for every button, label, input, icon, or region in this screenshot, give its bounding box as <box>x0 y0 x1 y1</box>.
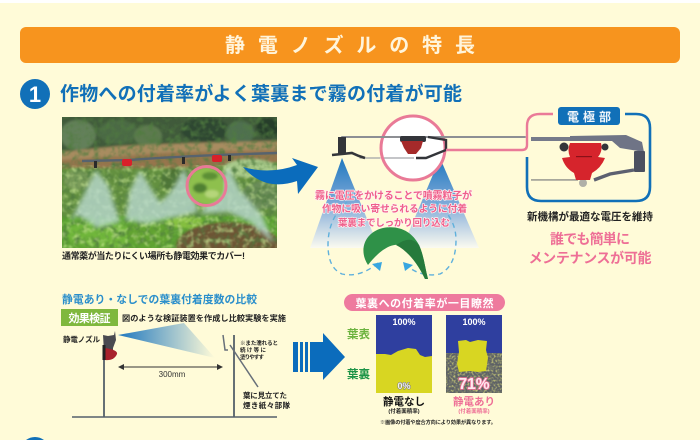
arrow: photo to diagram <box>243 158 318 194</box>
test paper: with static: 71% <box>458 376 490 393</box>
title text: 静電ノズルの特長 <box>225 33 475 57</box>
test label badge: 効果検証 <box>68 311 110 325</box>
spray cone <box>118 323 215 358</box>
result label: without static: (付着面積率) <box>388 407 420 415</box>
frame label <box>558 107 620 125</box>
number badge <box>20 79 50 109</box>
spray plumes <box>70 166 274 244</box>
photo: spraying crops <box>62 117 277 248</box>
section 1 heading text: 作物への付着率がよく葉裏まで霧の付着が可能 <box>60 82 462 105</box>
test nozzle <box>103 331 117 360</box>
leaf side labels: 葉裏 <box>347 367 370 381</box>
test paper: with static <box>446 315 502 393</box>
result label: with static: (付着面積率) <box>458 407 490 415</box>
leaf side labels: 葉表 <box>347 327 370 341</box>
result label: without static: 静電なし <box>383 395 425 408</box>
target note <box>240 339 278 361</box>
number badge: 1 <box>29 82 41 107</box>
pink explanation text: 葉裏までしっかり回り込む <box>338 217 450 229</box>
pink connector line <box>446 114 553 150</box>
spray boom <box>82 153 277 168</box>
maintenance callout: 誰でも簡単に <box>550 231 630 247</box>
photo caption: 通常薬が当たりにくい場所も静電効果でカバー! <box>62 250 245 261</box>
right spray cone <box>402 158 479 248</box>
comparison heading: 静電あり・なしでの葉裏付着度数の比較 <box>62 292 257 306</box>
nozzle label: 静電ノズル <box>63 334 100 344</box>
next section badge <box>26 437 44 440</box>
poles <box>104 335 234 417</box>
dashed airflow paths <box>328 198 456 275</box>
distance arrow <box>118 364 223 370</box>
result label: with static <box>453 395 495 415</box>
left nozzle bracket <box>332 137 365 158</box>
boom rail <box>342 137 525 158</box>
target note: ※また濡れると <box>240 339 278 347</box>
target paper <box>223 335 258 387</box>
airflow arrowheads <box>372 231 413 271</box>
result label: without static <box>383 395 425 415</box>
section 1 heading <box>20 79 462 109</box>
blue frame <box>527 114 650 201</box>
left spray cone <box>310 158 379 248</box>
frame label: 電極部 <box>567 109 611 124</box>
top edge <box>0 0 700 3</box>
leaf target label: 煙き紙々部隊 <box>243 400 290 410</box>
maintenance callout: メンテナンスが可能 <box>528 250 652 266</box>
test paper: without static: 100% <box>392 317 416 327</box>
test label badge <box>61 309 118 326</box>
pink explanation text: 霧に電圧をかけることで噴霧粒子が <box>315 189 472 202</box>
leaf side labels <box>347 327 370 381</box>
leaf texture <box>62 117 277 248</box>
distance label: 300mm <box>159 370 186 379</box>
result label: with static: 静電あり <box>453 395 495 408</box>
leaf target label: 葉に見立てた <box>243 390 287 400</box>
results heading pill <box>344 294 505 311</box>
electrode caption: 新機構が最適な電圧を維持 <box>527 210 654 223</box>
pink explanation text <box>315 189 472 229</box>
leaf target label <box>243 390 290 410</box>
test paper: without static: 0% <box>397 381 411 391</box>
diagram: electrostatic spray <box>310 116 525 279</box>
arrow: rig to results <box>293 333 345 380</box>
pink highlight circle <box>187 166 226 206</box>
results heading pill: 葉裏への付着率が一目瞭然 <box>356 296 494 310</box>
electrode detail panel <box>446 107 654 266</box>
footnote: ※画像の付着や度合方向により効果が異なります。 <box>380 418 496 426</box>
circled crop <box>188 167 224 205</box>
maintenance callout <box>528 231 652 266</box>
target note: 続け等に <box>240 346 266 354</box>
test paper: without static <box>376 315 432 393</box>
electrode photo <box>531 135 645 187</box>
pink explanation text: 作物に吸い寄せられるように付着 <box>322 202 467 215</box>
magnifier circle <box>381 116 446 180</box>
test description: 図のような検証装置を作成し比較実験を実施 <box>122 313 286 323</box>
ground line <box>72 416 277 418</box>
test paper: with static: 100% <box>462 317 486 327</box>
leaf <box>363 227 428 279</box>
target note: 塗りやすす <box>240 353 264 361</box>
title bar <box>20 27 680 63</box>
test rig diagram <box>63 323 290 417</box>
